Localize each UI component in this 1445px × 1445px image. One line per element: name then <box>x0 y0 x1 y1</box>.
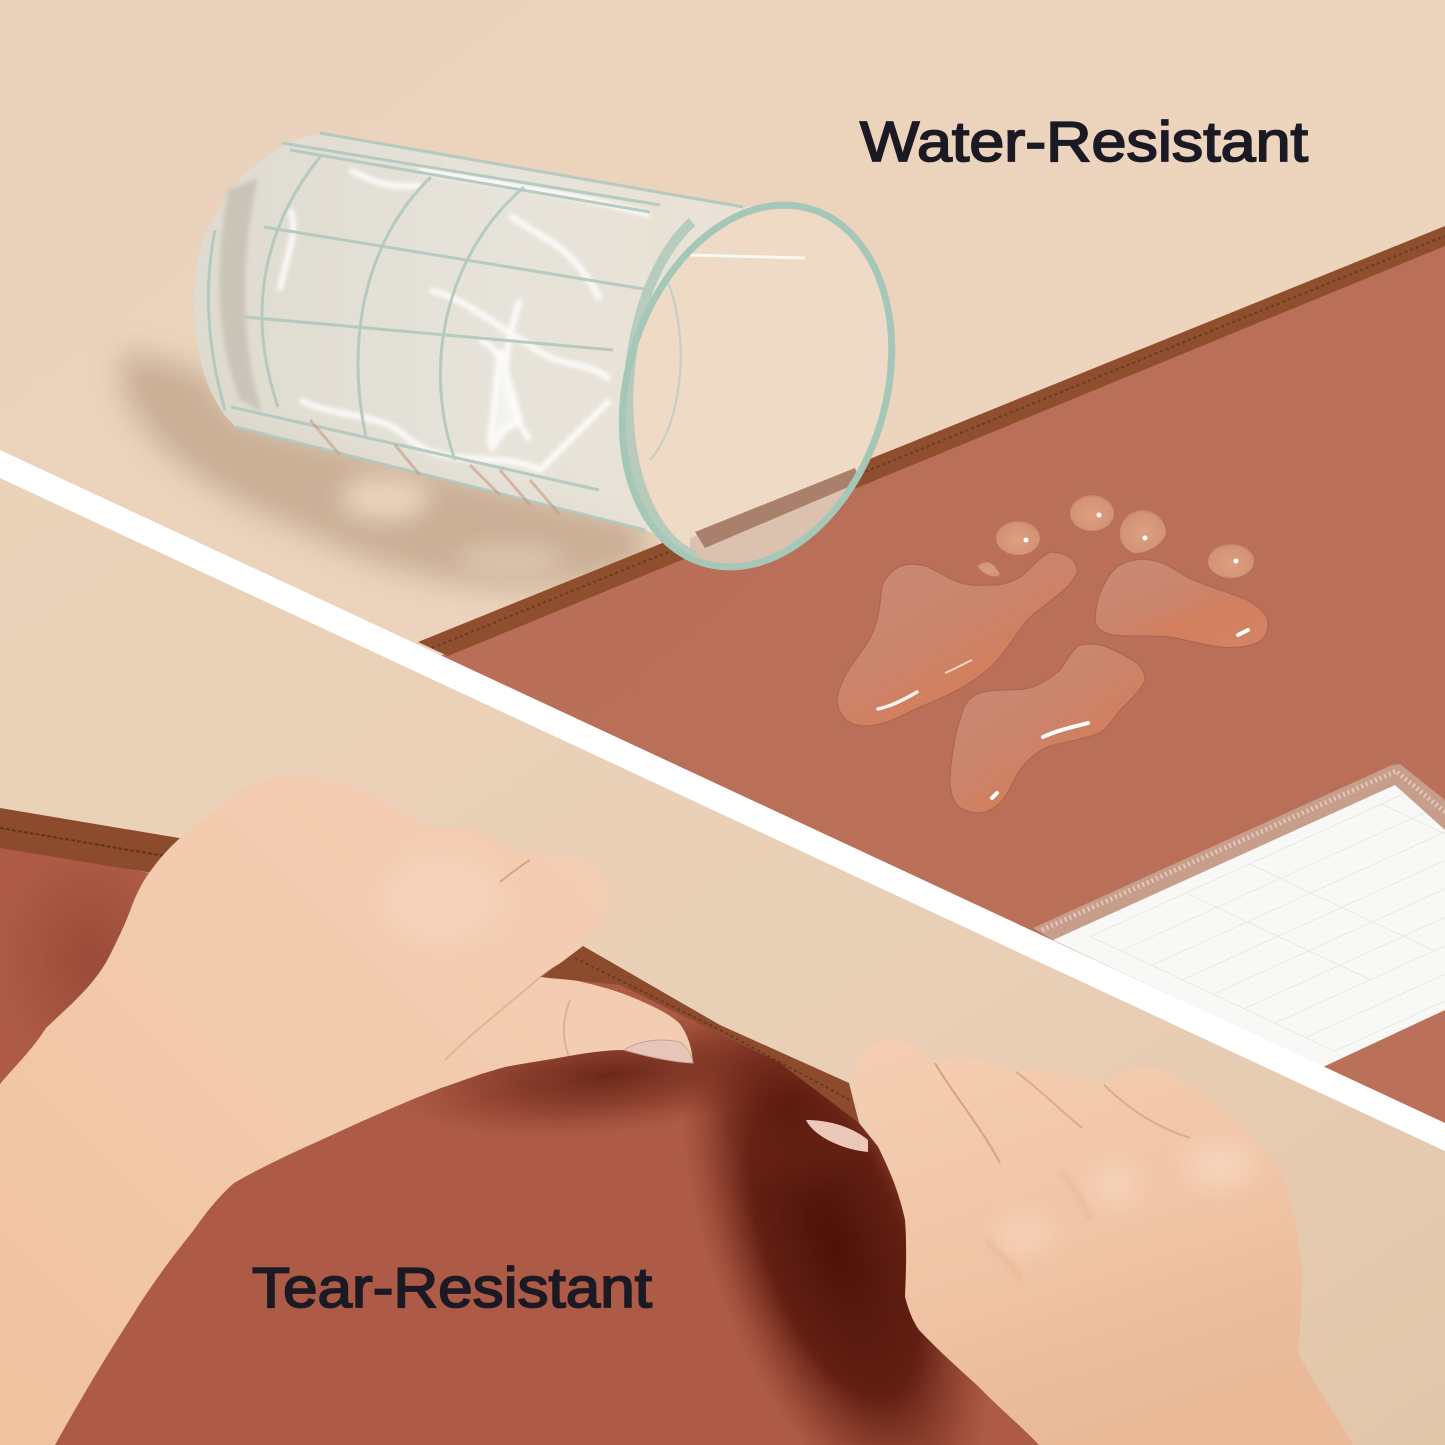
left hand <box>0 776 693 1445</box>
lifted mat <box>0 808 1060 1445</box>
desk mat <box>418 226 1445 934</box>
heading: Water-Resistant: Water-Resistant <box>860 110 1308 174</box>
mat edge binding, left <box>0 808 185 873</box>
glass shadow on desk <box>121 350 650 588</box>
mat edge binding, centre <box>542 946 859 1123</box>
drinking glass on its side <box>194 132 896 570</box>
panel: tear-resistant scene <box>0 478 1445 1445</box>
heading: Tear-Resistant: Tear-Resistant <box>252 1256 652 1320</box>
wood desk surface <box>0 0 1445 656</box>
right hand <box>806 1040 1353 1445</box>
glass opening <box>618 202 896 570</box>
panel: water-resistant scene <box>0 0 1445 1130</box>
wood desk surface <box>0 478 1445 1445</box>
paper card in clear sleeve <box>1033 764 1445 1066</box>
water droplets <box>837 495 1268 813</box>
divider band <box>0 450 1445 1151</box>
